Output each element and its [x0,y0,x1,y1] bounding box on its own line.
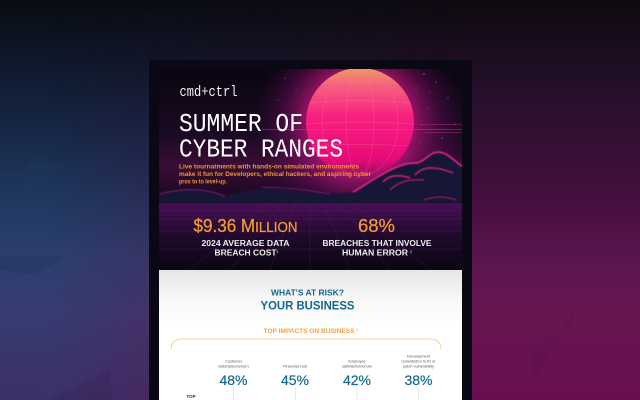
column: financial [281,364,309,388]
stat: data breach cost: $9.36 MILLION [194,215,298,236]
logo: cmd+ctrl: cmd+ctrl [180,85,238,101]
stat: data breach cost: BREACH COST [214,248,277,258]
icon: stars [278,73,456,142]
stat: human error [322,215,432,258]
white content panel [159,270,462,400]
column: development: patch vulnerability [403,364,434,368]
title: SUMMER OF [179,109,303,139]
hero panel [159,69,462,203]
section heading: YOUR BUSINESS [260,300,355,312]
column: customer: satisfaction/churn [218,364,249,368]
perspective grid [159,203,462,270]
stat: human error: BREACHES THAT INVOLVE [322,239,432,248]
column: customer [218,358,249,388]
hero description: Live tournatments with hands-on simulated environments [179,164,359,170]
bracket [171,339,441,349]
column: employee: Employee [348,358,366,364]
stat: data breach cost [194,215,298,258]
hero description: pros to to level-up. [179,178,227,186]
column: financial: 45% [281,372,309,388]
stat: human error: 68% [358,215,395,236]
row label: top: TOP [186,394,196,399]
hero description: make it fun for Developers, ethical hackers, and aspiring cyber [179,171,371,178]
section heading [260,288,355,312]
stat: data breach cost: 1 [277,250,279,254]
column: financial: Financial cost [283,364,308,368]
column: employee [342,358,372,388]
icon: planet sphere [306,68,414,176]
device frame panel [149,60,472,400]
column: customer: 48% [219,372,248,388]
column: customer: Customer [225,358,243,364]
stat: human error: HUMAN ERROR [342,248,408,258]
subheading: top impacts: 3 [356,328,358,332]
mountains [159,152,462,203]
title: CYBER RANGES [179,134,343,164]
sphere glow [264,69,457,203]
stat: human error: 2 [410,250,412,254]
hero description [179,164,371,186]
section heading: WHAT'S AT RISK? [271,288,344,298]
stats band [159,203,462,270]
column: employee: satisfaction/churn [342,364,372,368]
column stems [234,387,418,400]
stat: data breach cost: 2024 AVERAGE DATA [202,239,290,248]
column: employee: 42% [343,372,371,388]
subheading: top impacts: TOP IMPACTS ON BUSINESS [264,328,354,335]
column: development: remediation to fix or [401,358,436,364]
horizontal streaks [262,124,462,133]
title [179,109,343,164]
column: development: 38% [404,372,433,388]
column: development [401,354,436,388]
column: development: Development [407,354,431,358]
